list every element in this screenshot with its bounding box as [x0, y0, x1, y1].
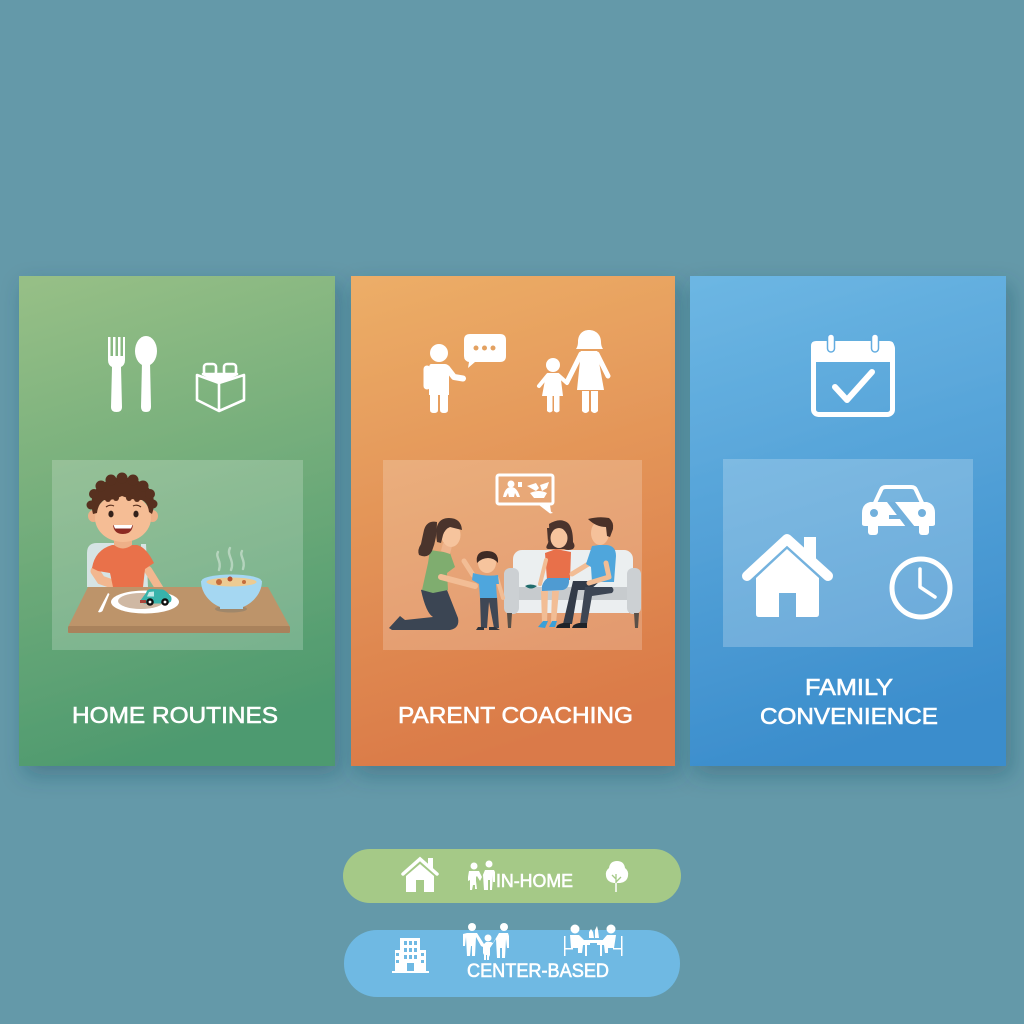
heading: family convenience: FAMILY	[805, 674, 893, 700]
panel: home routines	[19, 276, 335, 766]
child face	[95, 494, 151, 542]
heading: parent coaching: PARENT COACHING	[398, 702, 633, 728]
toy car	[140, 589, 172, 606]
icon: clock	[892, 559, 950, 617]
icon: office building	[392, 938, 429, 973]
icon: speaking adult	[427, 344, 463, 413]
table	[68, 587, 290, 633]
label: center-based: CENTER-BASED	[467, 961, 609, 982]
icon: spoon	[135, 336, 157, 412]
soup bowl	[201, 574, 262, 612]
child arms	[95, 570, 161, 591]
pill: center-based	[344, 923, 680, 997]
icon: fork	[108, 337, 125, 412]
child eyes and mouth	[106, 505, 141, 534]
chair	[87, 543, 148, 587]
inset: family coaching scene	[383, 460, 642, 650]
child neck and ears	[88, 510, 158, 548]
panel: parent coaching	[351, 276, 675, 766]
inset: child at table	[52, 460, 303, 650]
child hair	[86, 472, 158, 514]
steam	[217, 548, 244, 570]
pill: in-home	[343, 849, 681, 903]
icon: small family	[468, 860, 495, 890]
icon: building block	[197, 364, 244, 411]
icon: house	[747, 537, 828, 617]
icon: car	[862, 487, 935, 535]
icon: people at table	[564, 924, 622, 956]
plate	[111, 590, 179, 614]
panel: family convenience	[690, 276, 1006, 766]
coached child	[464, 551, 503, 630]
heading: family convenience	[760, 674, 938, 729]
icon: calendar with check	[811, 334, 894, 414]
knife	[98, 593, 110, 612]
speech box	[497, 475, 553, 514]
label: in-home: IN-HOME	[496, 871, 573, 891]
sofa	[504, 550, 641, 628]
inset: convenience icons	[723, 459, 973, 647]
therapist	[389, 518, 475, 630]
seated father	[556, 517, 616, 628]
icon: speech bubble	[464, 334, 506, 368]
icon: tree	[606, 861, 628, 892]
icon: family holding hands	[463, 923, 509, 960]
seated mother	[525, 520, 574, 628]
heading: home routines: HOME ROUTINES	[72, 702, 278, 728]
icon: child holding hands with mother	[539, 330, 608, 413]
child shirt	[92, 545, 154, 587]
heading: family convenience: CONVENIENCE	[760, 703, 938, 729]
icon: small house	[403, 858, 437, 892]
